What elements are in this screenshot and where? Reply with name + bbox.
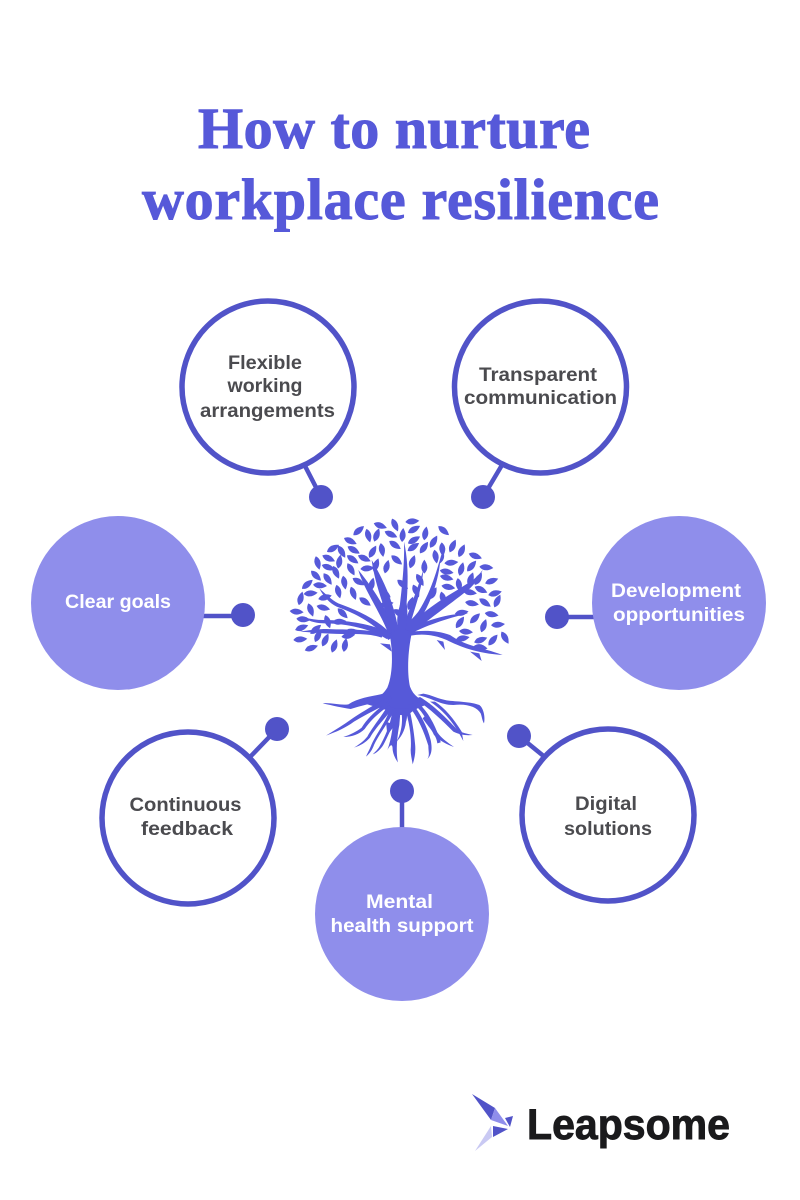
node: clear goals	[31, 516, 255, 690]
node: mental health support	[315, 779, 489, 1001]
node: digital solutions	[507, 724, 694, 901]
title: workplace resilience	[142, 167, 659, 232]
node: development opportunities: Development	[611, 580, 742, 602]
tree leaves	[405, 518, 420, 525]
node: continuous feedback: Continuous	[130, 794, 242, 816]
node: flexible working arrangements: arrangements	[200, 400, 335, 422]
logo: Leapsome	[472, 1094, 730, 1151]
tree trunk	[365, 629, 430, 715]
node: transparent communication: communication	[464, 387, 617, 409]
node: continuous feedback	[102, 717, 289, 904]
node: mental health support: health support	[330, 915, 474, 937]
node: digital solutions: Digital	[575, 793, 637, 815]
node: flexible working arrangements	[182, 301, 354, 509]
tree roots	[323, 692, 484, 764]
node: mental health support: Mental	[366, 891, 433, 913]
title	[142, 96, 659, 232]
node: clear goals: Clear goals	[65, 591, 171, 613]
node: transparent communication: Transparent	[479, 364, 598, 386]
node: digital solutions: solutions	[564, 818, 652, 840]
node: continuous feedback: feedback	[141, 818, 233, 840]
node: development opportunities	[545, 516, 766, 690]
tree branches	[300, 542, 503, 661]
node: transparent communication	[454, 301, 626, 509]
node: flexible working arrangements: working	[226, 375, 302, 397]
wordmark: Leapsome	[527, 1101, 730, 1149]
title: How to nurture	[198, 96, 590, 161]
icon: origami bird	[472, 1094, 513, 1151]
icon: tree	[289, 517, 511, 764]
node: flexible working arrangements: Flexible	[228, 352, 302, 374]
node: development opportunities: opportunities	[613, 604, 745, 626]
